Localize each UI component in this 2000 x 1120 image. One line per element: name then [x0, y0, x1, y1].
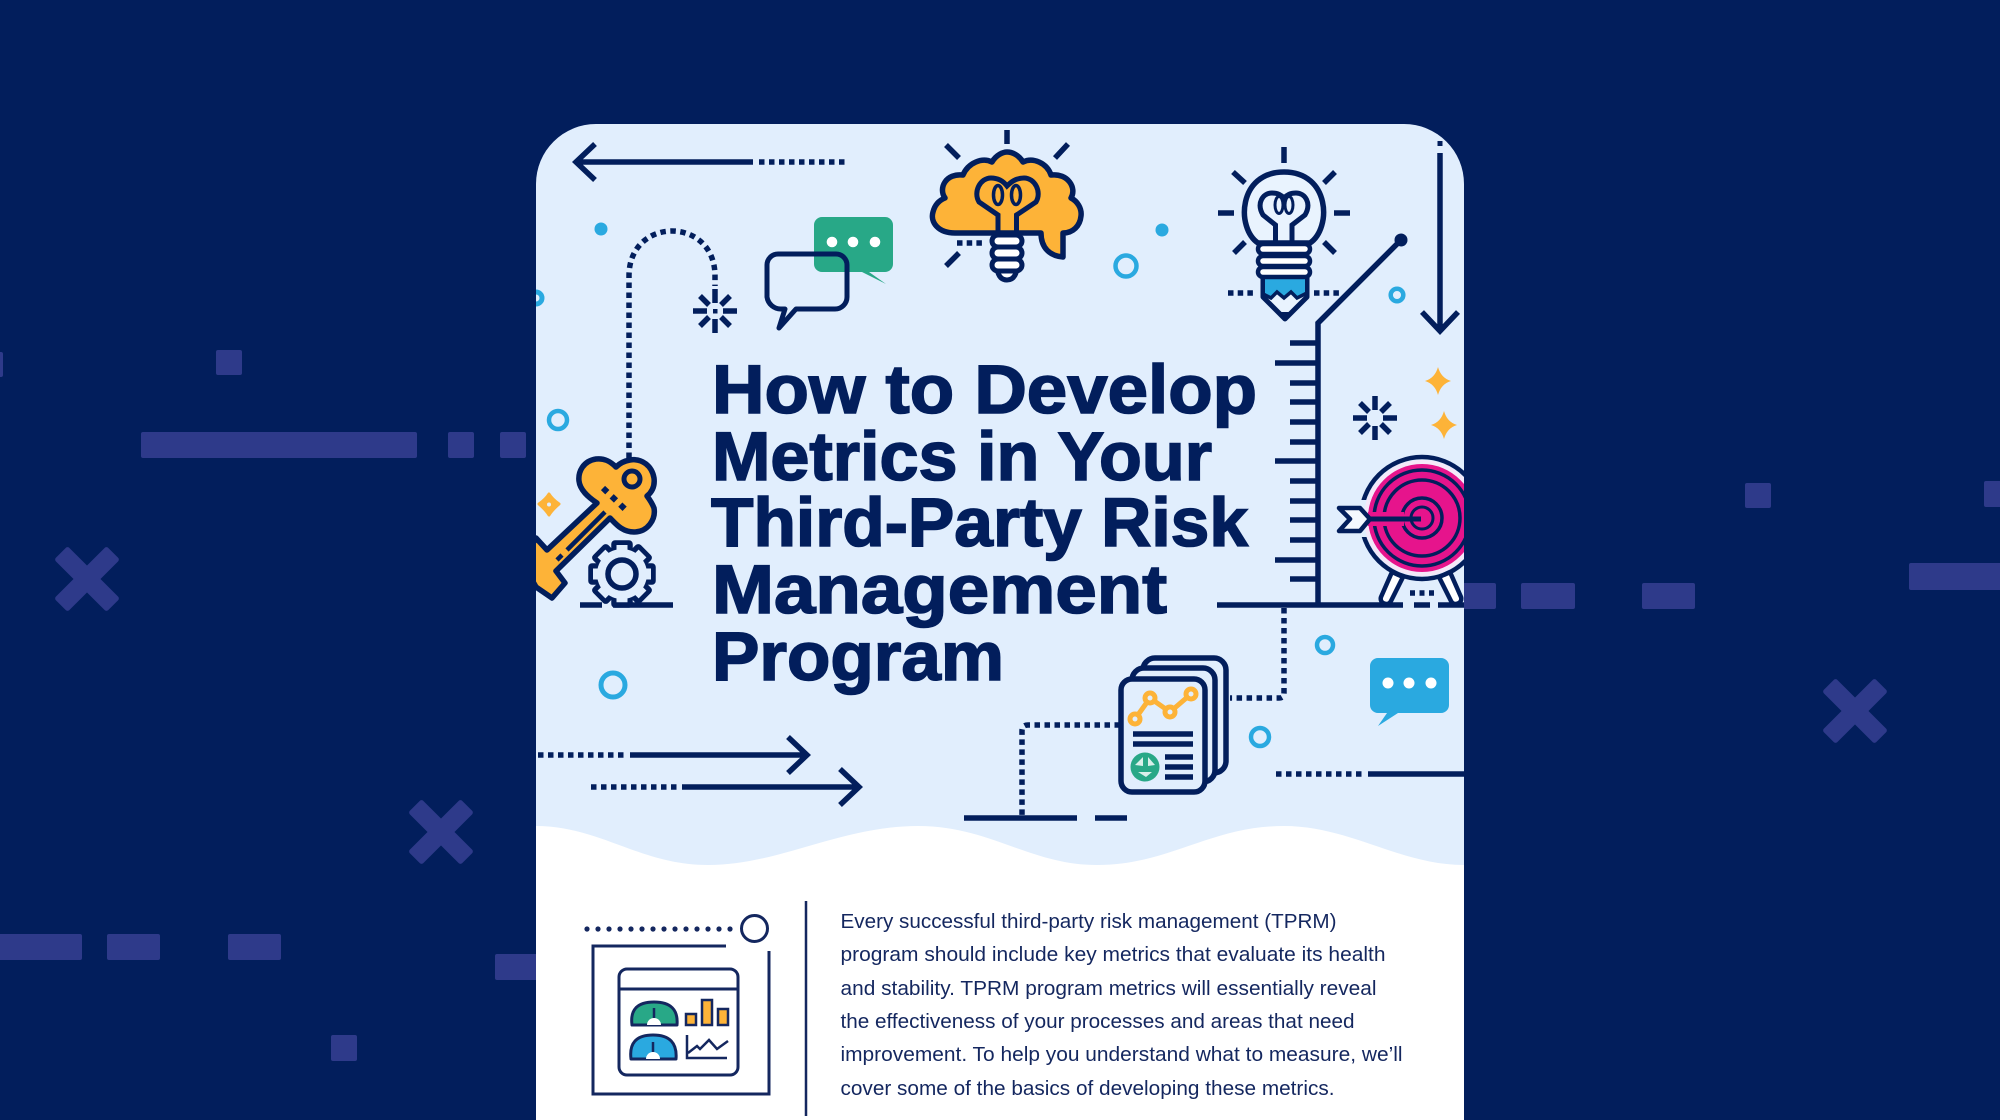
icon: blue speech bubble [1370, 658, 1449, 726]
title: Metrics in Your [712, 418, 1212, 495]
icon: orange diamond sparkle [539, 494, 559, 515]
icon: target with arrow [1336, 454, 1464, 602]
icon: outline speech bubble [767, 254, 847, 328]
arrow: lower left first [538, 737, 807, 773]
intro text [840, 910, 1402, 1100]
title: Third-Party Risk [711, 484, 1249, 561]
icons: orange sparkles [1425, 367, 1457, 439]
line right lower [1276, 771, 1464, 777]
arrow: lower left second [591, 769, 859, 805]
title: How to Develop [712, 351, 1257, 428]
icon: dashboard illustration [584, 916, 769, 1094]
icon: gear [580, 543, 673, 605]
intro text: and stability. TPRM program metrics will essentially reveal [840, 977, 1376, 1000]
dotted connector with starburst [629, 231, 737, 458]
hero background [536, 124, 1464, 884]
divider [805, 901, 807, 1116]
chart: ruler axis with ticks [1275, 234, 1408, 605]
intro text: cover some of the basics of developing these metrics. [840, 1077, 1334, 1100]
panel: card [522, 124, 1483, 1120]
icon: report documents [1121, 658, 1226, 792]
intro text: the effectiveness of your processes and areas that need [840, 1010, 1354, 1033]
baseline right [1217, 602, 1464, 608]
title [711, 351, 1257, 695]
dotted connectors around report [964, 608, 1284, 818]
intro text: Every successful third-party risk management (TPRM) [840, 910, 1336, 933]
icon: lightbulb pencil [1218, 147, 1350, 319]
icon: key [522, 459, 654, 598]
intro text: improvement. To help you understand what to measure, we’ll [840, 1043, 1402, 1066]
icon: starburst right [1353, 396, 1397, 440]
title: Program [712, 618, 1004, 695]
icons: blue dot and ring decorations [530, 222, 1403, 746]
arrow: right downward [1422, 141, 1458, 331]
intro text: program should include key metrics that evaluate its health [840, 943, 1386, 966]
arrow: top left [576, 144, 846, 180]
title: Management [712, 551, 1167, 628]
icon: green speech bubble [814, 217, 893, 284]
background pattern: squares, dashes and crosses [0, 350, 2000, 1061]
icon: brain lightbulb [932, 130, 1081, 280]
white wave body [536, 826, 1464, 1120]
